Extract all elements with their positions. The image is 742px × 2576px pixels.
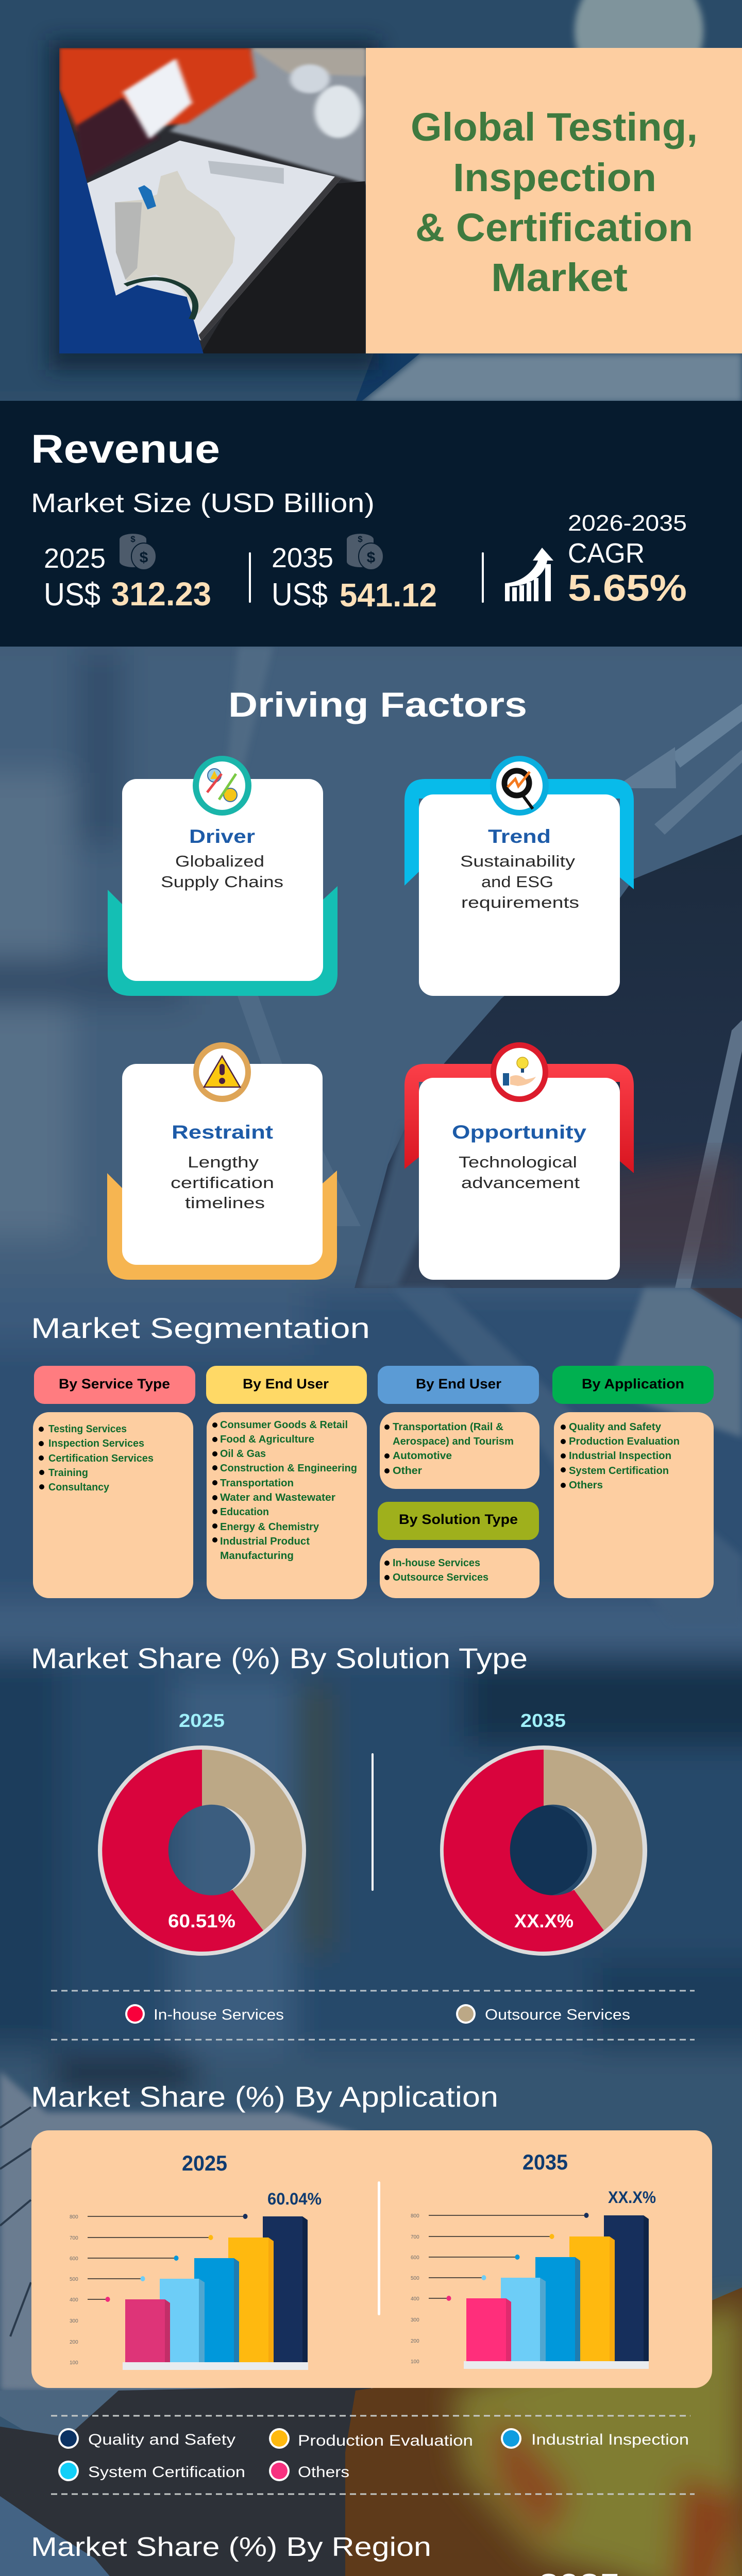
icon: warning badge — [193, 1042, 251, 1102]
trend text: Sustainability — [460, 852, 576, 870]
legend: solution type: In-house Services — [154, 2007, 284, 2023]
column: by end user: Education — [220, 1506, 269, 1518]
card: driver — [108, 756, 338, 996]
column: by end user: Energy & Chemistry — [220, 1521, 319, 1533]
legend: application: System Certification — [88, 2464, 245, 2481]
chart: donut 2025: 2025 — [179, 1710, 225, 1731]
chart: bars 2025: 800 — [70, 2214, 78, 2220]
card: restraint — [107, 1042, 337, 1280]
2025 market size: 312.23 — [111, 575, 211, 613]
chart: donut 2025: 60.51% — [168, 1910, 235, 1931]
2035 market size: 2035 — [272, 543, 333, 573]
CAGR block: 5.65% — [568, 568, 687, 609]
column: by end user: Manufacturing — [220, 1550, 294, 1562]
revenue band — [0, 401, 742, 647]
divider — [249, 552, 251, 603]
restraint text: Restraint — [172, 1122, 273, 1143]
card: trend — [404, 756, 634, 996]
column: by end user: Oil & Gas — [220, 1448, 266, 1460]
chart: bars 2035: 700 — [411, 2234, 419, 2240]
icon: trend badge — [490, 756, 549, 816]
2035 market size — [272, 543, 437, 614]
2025 market size — [44, 543, 211, 613]
title text — [411, 105, 698, 300]
panel: segmentation columns — [33, 1366, 714, 1599]
heading: market share by solution type: Market Share (%) By Solution Type — [31, 1642, 528, 1674]
icon: coins 2025: $ — [130, 534, 136, 544]
trend text: and ESG — [481, 873, 553, 891]
legend: application: Quality and Safety — [88, 2431, 235, 2448]
chart: bars 2025: 600 — [70, 2256, 78, 2262]
restraint text: Lengthy — [188, 1153, 259, 1171]
chart: bars 2035: 400 — [411, 2296, 419, 2302]
restraint text — [171, 1122, 274, 1212]
title text: Inspection — [453, 156, 656, 200]
column: by end user, second part: By End User — [416, 1376, 501, 1392]
CAGR block: 2026-2035 — [568, 511, 687, 536]
chart: bars 2025: 400 — [70, 2297, 78, 2303]
trend text: requirements — [461, 893, 579, 911]
chart: bars 2025: 700 — [70, 2235, 78, 2241]
column: by application: Others — [569, 1480, 603, 1491]
legend: application — [58, 2428, 689, 2481]
CAGR block: CAGR — [568, 538, 645, 569]
legend: application: Others — [298, 2464, 349, 2481]
icon: coins 2035: $ — [358, 534, 363, 544]
trend text: Trend — [488, 826, 551, 847]
legend: solution type: Outsource Services — [485, 2007, 630, 2023]
title banner — [59, 48, 742, 353]
column: by end user: By End User — [243, 1376, 329, 1392]
column: by end user: Food & Agriculture — [220, 1434, 314, 1445]
column: by service type: Inspection Services — [48, 1438, 144, 1449]
chart: bars 2035: 800 — [411, 2213, 419, 2219]
chart: bars 2035: 2035 — [522, 2150, 568, 2174]
CAGR block — [568, 511, 687, 609]
chart: bars 2035: 600 — [411, 2255, 419, 2261]
chart: bars 2035: 200 — [411, 2338, 419, 2344]
column: by service type: Consultancy — [48, 1482, 110, 1493]
column: by solution type: Outsource Services — [393, 1572, 488, 1583]
column: by service type: By Service Type — [59, 1376, 170, 1392]
legend: solution type — [125, 2004, 630, 2024]
column: by end user: Transportation — [220, 1478, 294, 1489]
column: by end user: Water and Wastewater — [220, 1492, 335, 1503]
column: by application: Quality and Safety — [569, 1421, 662, 1433]
2025 market size: 2025 — [44, 543, 106, 574]
heading: market segmentation: Market Segmentation — [31, 1312, 370, 1344]
column: by end user: Construction & Engineering — [220, 1463, 357, 1474]
title panel — [366, 48, 742, 353]
icon: growth chart arrow — [505, 548, 553, 601]
column: by application: Industrial Inspection — [569, 1450, 671, 1462]
column: by end user: Industrial Product — [220, 1536, 310, 1547]
title text: Global Testing, — [411, 105, 698, 149]
trend text — [460, 826, 579, 911]
legend: application: Industrial Inspection — [531, 2431, 689, 2448]
panel: application charts — [31, 2130, 712, 2388]
2025 market size: US$ — [44, 577, 100, 613]
column: by end user, second part: Aerospace) and Tourism — [393, 1436, 514, 1447]
column: by end user, second part: Automotive — [393, 1450, 452, 1462]
column: by end user: Consumer Goods & Retail — [220, 1419, 348, 1431]
column: by solution type: By Solution Type — [399, 1512, 518, 1527]
chart: bars 2025 — [70, 2151, 322, 2370]
column: by service type: Testing Services — [48, 1423, 127, 1435]
title text: Market — [491, 256, 628, 300]
column: by end user, second part: Transportation (Rail & — [393, 1421, 503, 1433]
chart: bars 2035: 500 — [411, 2276, 419, 2281]
card: opportunity — [404, 1042, 634, 1280]
chart: bars 2035: 100 — [411, 2359, 419, 2365]
driver text: Driver — [189, 826, 255, 847]
opportunity text: advancement — [461, 1174, 580, 1192]
chart: donut 2035 — [440, 1710, 647, 1956]
restraint text: timelines — [185, 1194, 265, 1212]
chart: donut 2035: XX.X% — [514, 1910, 574, 1931]
chart: donut 2025 — [98, 1710, 306, 1956]
column: by end user — [206, 1366, 367, 1599]
icon: driver badge — [193, 756, 251, 816]
heading: market share by region: Market Share (%) By Region — [31, 2532, 431, 2562]
opportunity text: Opportunity — [452, 1122, 587, 1143]
column: by solution type: In-house Services — [393, 1557, 480, 1569]
opportunity text — [452, 1122, 587, 1192]
opportunity text: Technological — [459, 1153, 577, 1171]
driver text — [161, 826, 283, 891]
column: by end user, second part — [378, 1366, 539, 1489]
icon: coins 2035: $ — [367, 549, 376, 566]
restraint text: certification — [171, 1174, 274, 1192]
market size label: Market Size (USD Billion) — [31, 488, 375, 518]
column: by service type: Certification Services — [48, 1453, 154, 1464]
column: by service type: Training — [48, 1467, 88, 1479]
column: by application: System Certification — [569, 1465, 669, 1477]
2035 market size: 541.12 — [340, 577, 437, 614]
heading: revenue: Revenue — [31, 426, 220, 471]
chart: bars 2035: 300 — [411, 2317, 419, 2323]
chart: bars 2025: 200 — [70, 2340, 78, 2345]
chart: donut 2035: 2035 — [520, 1710, 566, 1731]
divider — [482, 552, 484, 603]
chart: bars 2025: 500 — [70, 2277, 78, 2282]
chart: bars 2035: XX.X% — [608, 2188, 656, 2207]
chart: bars 2025: 300 — [70, 2318, 78, 2324]
divider — [372, 1753, 374, 1891]
column: by application: By Application — [582, 1376, 684, 1392]
photo: gloved hand writing on clipboard — [59, 48, 366, 353]
title text: & Certification — [415, 206, 693, 250]
chart: bars 2025: 2025 — [182, 2151, 227, 2175]
chart: bars 2025: 60.04% — [267, 2190, 322, 2208]
icon: coins 2035 — [347, 534, 383, 570]
column: by application — [552, 1366, 714, 1598]
column: by end user, second part: Other — [393, 1465, 422, 1477]
2035 market size: US$ — [272, 577, 328, 613]
heading: market share by application: Market Share (%) By Application — [31, 2080, 498, 2113]
chart: bars 2035 — [411, 2150, 656, 2369]
driver text: Globalized — [175, 852, 264, 870]
column: by application: Production Evaluation — [569, 1436, 680, 1447]
icon: coins 2025 — [120, 534, 156, 570]
column: by service type — [33, 1366, 195, 1598]
icon: coins 2025: $ — [140, 549, 148, 566]
driver text: Supply Chains — [161, 873, 283, 891]
legend: application: Production Evaluation — [298, 2432, 473, 2449]
column: by solution type — [378, 1502, 539, 1598]
chart: bars 2025: 100 — [70, 2360, 78, 2366]
heading: driving factors: Driving Factors — [228, 685, 527, 724]
icon: opportunity badge — [491, 1042, 548, 1102]
